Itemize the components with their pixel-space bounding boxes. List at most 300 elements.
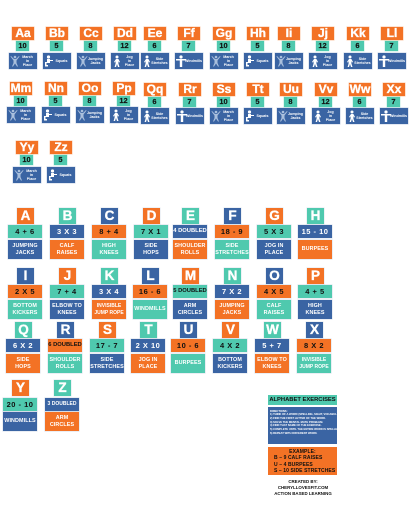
sum: 10 - 6 xyxy=(177,341,199,350)
card: Nn xyxy=(42,81,70,124)
card: Mm xyxy=(6,81,36,124)
exercise: Jog in Place: Jog xyxy=(125,109,132,113)
exercise xyxy=(255,354,289,373)
letter: Dd xyxy=(117,26,133,40)
exercise: RAISES xyxy=(264,310,284,316)
exercise: Jog in Place: Place xyxy=(124,117,133,121)
number xyxy=(316,41,329,51)
letter xyxy=(178,27,200,40)
exercise: March in Place: in xyxy=(26,59,29,63)
number: 5 xyxy=(53,96,58,105)
exercise: ARM xyxy=(184,303,196,309)
exercise: BURPEES xyxy=(175,360,201,366)
number xyxy=(387,97,400,107)
card: Vv xyxy=(312,82,340,124)
letter xyxy=(17,268,34,284)
sum: 2 X 10 xyxy=(136,341,160,350)
letter xyxy=(114,27,136,40)
tile: Z xyxy=(45,380,79,431)
exercise xyxy=(45,412,79,431)
exercise: KNEES xyxy=(262,364,282,370)
sum xyxy=(8,285,42,298)
number: 7 xyxy=(186,41,191,50)
exercise: March in Place: Place xyxy=(224,118,233,122)
letter xyxy=(17,208,34,224)
letter xyxy=(383,83,405,96)
exercise: Jog in Place: in xyxy=(128,59,131,63)
letter xyxy=(113,82,135,95)
number: 8 xyxy=(88,41,93,50)
card: Gg xyxy=(210,26,238,70)
letter xyxy=(144,27,166,40)
exercise xyxy=(50,300,84,319)
card: Qq xyxy=(140,82,170,124)
tile: R xyxy=(48,322,82,373)
letter: D xyxy=(147,208,156,223)
number: 8 xyxy=(87,96,92,105)
sum xyxy=(215,225,249,238)
exercise: Jog in Place: Place xyxy=(125,63,134,67)
exercise: Jumping Jacks xyxy=(275,53,303,69)
letter: Gg xyxy=(216,26,232,40)
exercise: SHOULDER xyxy=(49,357,81,363)
exercise: JUMPING xyxy=(219,303,245,309)
letter: Uu xyxy=(283,82,299,96)
tile: B xyxy=(50,208,84,260)
credits: ACTION BASED LEARNING xyxy=(274,491,332,496)
letter: Oo xyxy=(82,81,98,95)
number: 8 xyxy=(286,41,291,50)
letter xyxy=(179,83,201,96)
tile: L xyxy=(132,268,168,320)
letter xyxy=(182,208,199,224)
exercise: ROLLS xyxy=(56,364,74,370)
letter: K xyxy=(105,268,114,283)
exercise: JACKS xyxy=(16,250,34,256)
exercise: March in Place xyxy=(210,53,238,69)
letter: M xyxy=(185,268,196,283)
letter xyxy=(101,208,118,224)
exercise xyxy=(297,354,331,373)
exercise: KNEES xyxy=(305,310,325,316)
exercise: Squats xyxy=(244,53,272,69)
exercise: ELBOW TO xyxy=(257,357,287,363)
exercise: March in Place xyxy=(7,107,35,123)
card: Ff xyxy=(174,26,204,70)
letter: A xyxy=(21,208,30,223)
exercise: Squats: Squats xyxy=(60,173,71,177)
sum xyxy=(173,225,207,238)
exercise: Jog in Place: Place xyxy=(323,63,332,67)
sum xyxy=(92,285,126,298)
letter: Aa xyxy=(15,26,31,40)
tile: M xyxy=(172,268,208,320)
sum xyxy=(6,339,40,352)
card: Cc xyxy=(76,26,106,70)
letter xyxy=(180,322,197,338)
exercise: Jog in Place: Place xyxy=(326,118,335,122)
tile: W xyxy=(255,322,289,373)
number xyxy=(14,96,27,106)
letter: U xyxy=(184,322,193,337)
exercise: ELBOW TO xyxy=(52,303,82,309)
letter xyxy=(381,27,403,40)
card: Rr xyxy=(176,82,204,124)
number xyxy=(351,41,364,51)
exercise: BOTTOM xyxy=(218,357,242,363)
exercise: Jumping Jacks: Jacks xyxy=(290,116,300,120)
number xyxy=(251,41,264,51)
exercise: KNEES xyxy=(99,250,119,256)
letter: Ee xyxy=(148,26,162,40)
letter xyxy=(59,268,76,284)
exercise: March in Place: March xyxy=(20,109,31,113)
sum xyxy=(45,398,79,411)
letter: Ss xyxy=(217,82,231,96)
exercise: HIGH xyxy=(102,243,116,249)
letter: Q xyxy=(18,322,29,337)
exercise: Jumping Jacks: Jumping xyxy=(288,112,303,116)
card: Yy xyxy=(12,140,42,184)
exercise: WINDMILLS xyxy=(4,418,36,424)
exercise: Side Stretches: Side xyxy=(156,57,163,61)
letter xyxy=(307,208,324,224)
exercise: Windmills: Windmills xyxy=(390,114,407,118)
number: 6 xyxy=(152,41,157,50)
exercise: JOG IN xyxy=(139,357,157,363)
letter xyxy=(312,27,334,40)
letter xyxy=(12,27,34,40)
card: Xx xyxy=(380,82,408,124)
tile: N xyxy=(214,268,250,320)
exercise: March in Place: March xyxy=(26,169,37,173)
exercise: Windmills: Windmills xyxy=(185,59,202,63)
number xyxy=(217,41,230,51)
exercise xyxy=(92,240,126,259)
sum xyxy=(171,339,205,352)
sum: 6 DOUBLED xyxy=(48,342,82,348)
letter xyxy=(306,322,323,338)
letter: Qq xyxy=(147,82,163,96)
sum: 4 + 5 xyxy=(305,287,325,296)
panel: example: EXAMPLE: xyxy=(289,449,316,455)
letter xyxy=(247,27,269,40)
sum: 18 - 9 xyxy=(221,227,243,236)
letter: Yy xyxy=(20,140,34,154)
letter: Bb xyxy=(49,26,65,40)
number xyxy=(49,96,62,106)
number xyxy=(54,155,67,165)
card: Aa xyxy=(8,26,38,70)
exercise xyxy=(298,300,332,319)
exercise: STRETCHES xyxy=(90,364,124,370)
letter: Y xyxy=(16,380,25,395)
number: 7 xyxy=(391,97,396,106)
letter: Ff xyxy=(183,26,195,40)
card: Pp xyxy=(110,81,138,124)
letter xyxy=(278,27,300,40)
exercise xyxy=(215,300,249,319)
letter xyxy=(266,208,283,224)
card: Jj xyxy=(308,26,338,70)
exercise xyxy=(48,354,82,373)
exercise: March in Place: March xyxy=(223,110,234,114)
tile: F xyxy=(214,208,250,260)
exercise: Squats xyxy=(42,107,70,123)
exercise: March in Place: Place xyxy=(27,177,36,181)
sum: 4 + 6 xyxy=(15,227,35,236)
exercise: JACKS xyxy=(223,310,241,316)
exercise: March in Place: in xyxy=(227,59,230,63)
letter: T xyxy=(144,322,153,337)
letter xyxy=(224,208,241,224)
sum: 4 DOUBLED xyxy=(173,228,207,234)
exercise xyxy=(257,300,291,319)
letter xyxy=(101,268,118,284)
exercise: WINDMILLS xyxy=(134,306,166,312)
letter xyxy=(224,268,241,284)
exercise: SIDE xyxy=(16,357,29,363)
letter: X xyxy=(310,322,319,337)
tile: U xyxy=(171,322,205,373)
number: 6 xyxy=(355,41,360,50)
exercise: Side Stretches: Stretches xyxy=(151,116,168,120)
tile: C xyxy=(92,208,126,260)
letter xyxy=(266,268,283,284)
sum: 3 X 3 xyxy=(57,227,77,236)
number xyxy=(217,97,230,107)
exercise: Jumping Jacks: Jacks xyxy=(89,115,99,119)
letter: O xyxy=(269,268,280,283)
exercise xyxy=(133,300,167,319)
sum: 20 - 10 xyxy=(7,400,33,409)
panel: example: B – 9 CALF RAISES xyxy=(274,455,322,461)
letter xyxy=(57,322,74,338)
exercise xyxy=(171,354,205,373)
exercise: March in Place: March xyxy=(22,55,33,59)
tile: P xyxy=(298,268,332,319)
number: 12 xyxy=(318,41,327,50)
panel: directions: 1) THINK OF A WORD (SPELLING, SIGHT, VOCABULARY WORD) xyxy=(270,413,353,416)
exercise: JUMP ROPE xyxy=(299,364,329,370)
tile: Q xyxy=(6,322,40,373)
number xyxy=(182,41,195,51)
sum xyxy=(50,225,84,238)
letter xyxy=(315,83,337,96)
letter: H xyxy=(311,208,320,223)
sum: 5 X 3 xyxy=(264,227,284,236)
exercise: Windmills xyxy=(380,108,408,124)
card: Uu xyxy=(276,82,306,124)
exercise xyxy=(92,300,126,319)
exercise: JUMP ROPE xyxy=(94,310,124,316)
letter xyxy=(99,322,116,338)
letter: Ll xyxy=(387,26,397,40)
exercise: STRETCHES xyxy=(215,250,249,256)
letter xyxy=(222,322,239,338)
letter xyxy=(182,268,199,284)
sum xyxy=(134,225,168,238)
letter: E xyxy=(186,208,195,223)
sum: 8 + 4 xyxy=(99,227,119,236)
sum: 8 X 2 xyxy=(304,341,324,350)
tile: V xyxy=(213,322,247,373)
letter xyxy=(45,82,67,95)
exercise: Squats: Squats xyxy=(256,59,268,63)
exercise: Side Stretches: Stretches xyxy=(354,61,371,65)
number: 5 xyxy=(58,155,63,164)
sum xyxy=(92,225,126,238)
letter: Rr xyxy=(183,82,197,96)
exercise: Side Stretches: Side xyxy=(156,112,163,116)
sum: 7 + 4 xyxy=(57,287,77,296)
card: Zz xyxy=(46,140,76,184)
letter: Jj xyxy=(318,26,328,40)
letter: N xyxy=(228,268,237,283)
letter xyxy=(142,268,159,284)
sum xyxy=(90,339,124,352)
exercise: Jog in Place xyxy=(111,53,139,69)
exercise xyxy=(134,240,168,259)
letter: Pp xyxy=(116,81,132,95)
number: 10 xyxy=(16,96,25,105)
exercise: CALF xyxy=(60,243,74,249)
tile: X xyxy=(297,322,331,373)
number: 5 xyxy=(54,41,59,50)
exercise: CIRCLES xyxy=(50,422,74,428)
credits xyxy=(263,479,343,503)
number: 7 xyxy=(389,41,394,50)
letter: Xx xyxy=(387,82,401,96)
exercise: Jog in Place xyxy=(309,53,337,69)
exercise: Side Stretches: Side xyxy=(361,112,368,116)
panel: directions: 6) REPEAT WITH DIFFERENT WORD. xyxy=(270,432,317,435)
exercise: ROLLS xyxy=(181,250,199,256)
letter: R xyxy=(61,322,70,337)
exercise: SIDE xyxy=(144,243,157,249)
sum xyxy=(298,225,332,238)
sum xyxy=(257,225,291,238)
card: Tt xyxy=(244,82,272,124)
letter xyxy=(50,141,72,154)
sum xyxy=(297,339,331,352)
letter xyxy=(347,27,369,40)
exercise xyxy=(257,240,291,259)
exercise: Jog in Place: Jog xyxy=(327,110,334,114)
exercise: Windmills: Windmills xyxy=(388,59,405,63)
letter xyxy=(213,83,235,96)
number xyxy=(84,41,97,51)
exercise xyxy=(6,354,40,373)
exercise: KNEES xyxy=(57,310,77,316)
exercise: KICKERS xyxy=(13,310,37,316)
card: Oo xyxy=(76,81,104,124)
sum: 5 DOUBLED xyxy=(173,288,207,294)
exercise: March in Place: Place xyxy=(21,117,30,121)
exercise: HOPS xyxy=(143,250,159,256)
tile: Y xyxy=(3,380,37,431)
number: 12 xyxy=(120,41,129,50)
exercise: Windmills xyxy=(176,108,204,124)
exercise: Jumping Jacks: Jumping xyxy=(286,57,301,61)
exercise: Squats xyxy=(47,167,75,183)
letter: Hh xyxy=(250,26,266,40)
number: 7 xyxy=(187,97,192,106)
number: 5 xyxy=(255,41,260,50)
panel: example: S – 10 SIDE STRETCHES xyxy=(274,468,335,474)
panel: example: U – 4 BURPEES xyxy=(274,462,313,468)
number xyxy=(148,41,161,51)
sum: 4 X 5 xyxy=(264,287,284,296)
exercise: Side Stretches: Stretches xyxy=(356,116,373,120)
sum xyxy=(255,339,289,352)
number xyxy=(282,41,295,51)
number xyxy=(50,41,63,51)
sum xyxy=(48,339,82,352)
exercise: ARM xyxy=(56,415,68,421)
number xyxy=(284,97,297,107)
tile: G xyxy=(256,208,292,260)
panel: directions: 4) FIND THAT NAME OF THE EXERCISE. xyxy=(270,424,321,427)
letter xyxy=(80,27,102,40)
sum: 3 X 4 xyxy=(99,287,119,296)
exercise: BOTTOM xyxy=(13,303,37,309)
tile: T xyxy=(131,322,165,373)
exercise: Jumping Jacks xyxy=(76,107,104,123)
letter: P xyxy=(311,268,320,283)
sum xyxy=(133,285,167,298)
exercise: Windmills: Windmills xyxy=(186,114,203,118)
tile: K xyxy=(92,268,126,320)
exercise: Squats: Squats xyxy=(256,114,268,118)
number: 10 xyxy=(219,97,228,106)
letter: F xyxy=(228,208,237,223)
exercise: Windmills xyxy=(175,53,203,69)
number xyxy=(251,97,264,107)
exercise: INVISIBLE xyxy=(97,303,121,309)
letter xyxy=(46,27,68,40)
sum xyxy=(173,285,207,298)
exercise: Side Stretches: Side xyxy=(359,57,366,61)
exercise: March in Place: in xyxy=(30,173,33,177)
letter: Mm xyxy=(11,81,31,95)
exercise: CALF xyxy=(267,303,281,309)
letter: Z xyxy=(58,380,67,395)
exercise: JOG IN xyxy=(265,243,283,249)
exercise: Jog in Place xyxy=(110,107,138,123)
card: Ss xyxy=(210,82,238,124)
sum xyxy=(215,285,249,298)
exercise: Squats: Squats xyxy=(54,113,66,117)
exercise: SHOULDER xyxy=(174,243,206,249)
exercise: Side Stretches: Stretches xyxy=(151,61,168,65)
letter: Kk xyxy=(350,26,366,40)
exercise xyxy=(131,354,165,373)
number: 10 xyxy=(18,41,27,50)
sum xyxy=(8,225,42,238)
exercise: Jumping Jacks: Jacks xyxy=(288,61,298,65)
exercise: March in Place xyxy=(210,108,238,124)
sum: 17 - 7 xyxy=(96,341,118,350)
sum xyxy=(213,339,247,352)
exercise: INVISIBLE xyxy=(302,357,326,363)
exercise xyxy=(215,240,249,259)
letter: Zz xyxy=(54,140,68,154)
number xyxy=(385,41,398,51)
exercise: March in Place: Place xyxy=(23,63,32,67)
letter xyxy=(280,83,302,96)
letter: C xyxy=(105,208,114,223)
